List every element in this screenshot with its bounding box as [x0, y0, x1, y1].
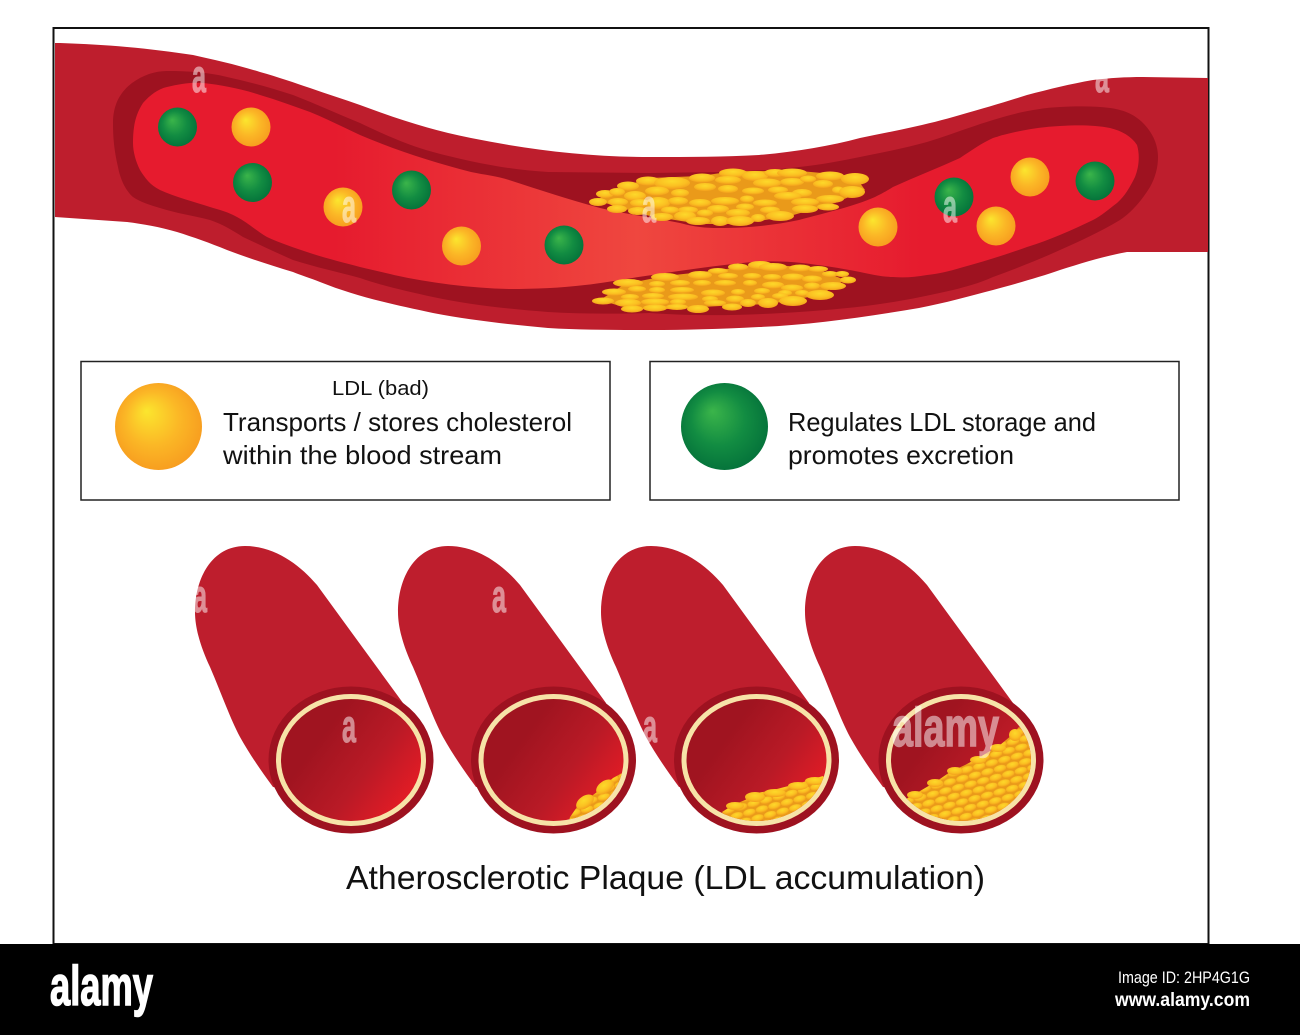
footer logo: alamy — [50, 954, 153, 1017]
stock watermarks: a — [342, 700, 356, 752]
vessel 4: severe plaque — [805, 546, 1044, 834]
LDL description: within the blood stream — [222, 440, 502, 470]
vessel 1: no plaque — [195, 546, 434, 834]
artery outer wall — [55, 43, 1208, 330]
HDL description — [788, 407, 1096, 470]
footer bar — [0, 944, 1300, 1035]
stock watermarks: a — [192, 50, 206, 102]
icon: HDL sphere — [681, 383, 768, 470]
website: www.alamy.com — [1114, 990, 1250, 1011]
HDL description: promotes excretion — [788, 440, 1014, 470]
vessel 3: moderate plaque — [601, 546, 840, 835]
legend box: HDL — [650, 362, 1179, 500]
LDL description: Transports / stores cholesterol — [223, 407, 572, 437]
HDL description: Regulates LDL storage and — [788, 407, 1096, 437]
plaque — [906, 727, 1031, 821]
vessel 2: small plaque — [398, 546, 640, 834]
stock watermarks: a — [643, 700, 657, 752]
stock watermarks: a — [342, 180, 356, 232]
stock watermarks: alamy — [892, 696, 999, 758]
plaque — [569, 773, 622, 820]
stock watermarks: a — [492, 570, 506, 622]
plaque — [722, 776, 824, 821]
image id: Image ID: 2HP4G1G — [1118, 968, 1250, 987]
blood particles: LDL orange and HDL green — [158, 108, 1114, 266]
LDL description — [222, 407, 572, 470]
stock watermarks: a — [642, 180, 656, 232]
stock watermarks — [192, 50, 1109, 758]
artery inner wall — [113, 71, 1158, 315]
lower plaque deposit — [592, 261, 856, 313]
icon: LDL sphere — [115, 383, 202, 470]
artery lumen — [133, 83, 1139, 289]
artery longitudinal section — [55, 43, 1208, 330]
stock watermarks: a — [943, 180, 957, 232]
upper plaque deposit — [589, 168, 869, 226]
legend box: LDL — [81, 362, 610, 500]
caption: Atherosclerotic Plaque (LDL accumulation) — [346, 859, 985, 896]
stock watermarks: a — [193, 570, 207, 622]
page frame — [54, 28, 1208, 944]
LDL heading: LDL (bad) — [332, 378, 429, 400]
stock watermarks: a — [1095, 50, 1109, 102]
